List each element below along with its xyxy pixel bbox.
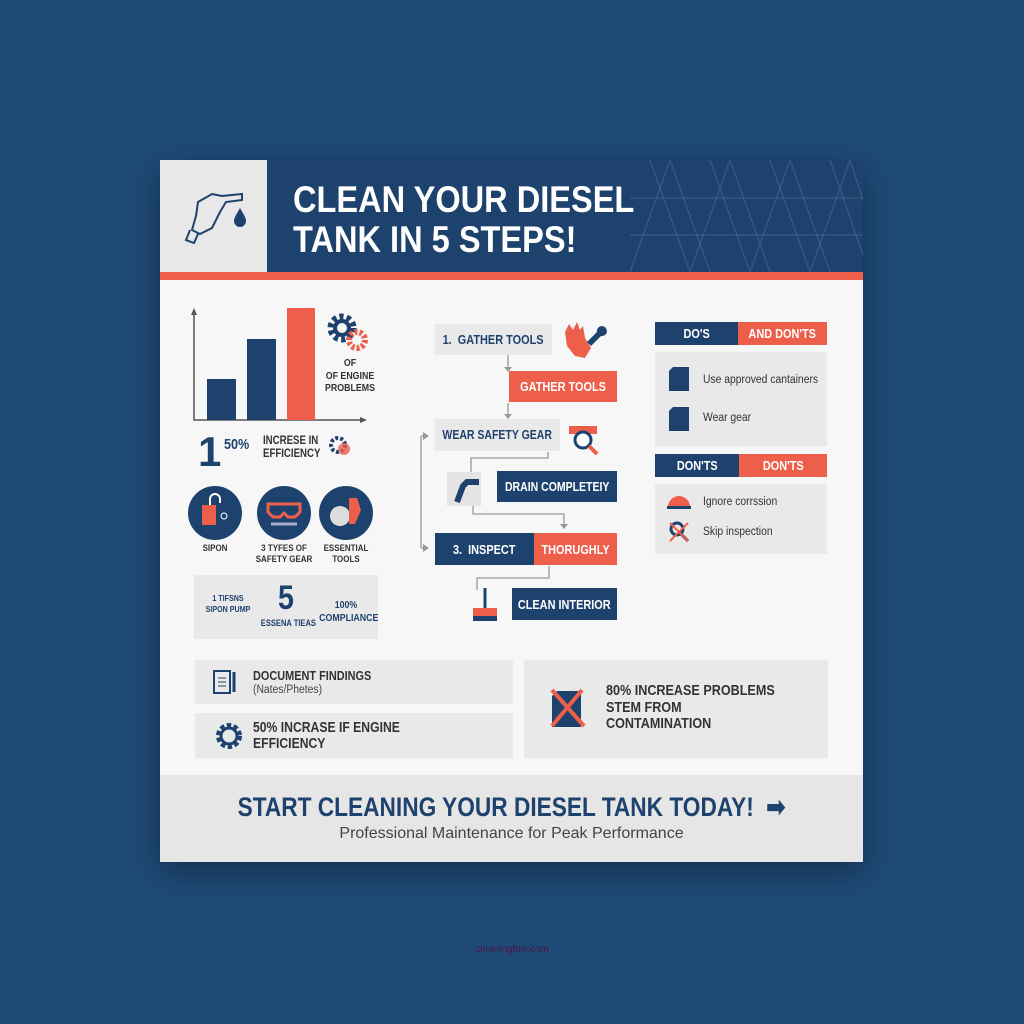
don'ts header: DON'TS	[677, 458, 717, 473]
icon: magnifier	[569, 426, 598, 456]
stat: 50% increase: 50%	[224, 436, 249, 453]
text: engine problems: OF	[344, 357, 356, 369]
contamination box: STEM FROM	[606, 698, 682, 716]
stats box: ESSENA TIEAS	[261, 618, 316, 628]
contamination box: 80% INCREASE PROBLEMS	[606, 682, 775, 699]
title: CLEAN YOUR DIESEL	[293, 179, 634, 220]
circle icons	[188, 486, 373, 565]
stats box	[194, 575, 378, 639]
orange stripe	[160, 272, 863, 280]
bar chart	[191, 308, 367, 423]
footer call to action: START CLEANING YOUR DIESEL TANK TODAY! ➡	[238, 792, 785, 822]
icon: siphon	[188, 486, 242, 540]
engine efficiency box	[195, 713, 513, 758]
do's list: Wear gear	[703, 412, 751, 424]
stat: 50% increase: 1	[198, 428, 221, 475]
do's list: Use approved cantainers	[703, 374, 818, 386]
stat: 50% increase: EFFICIENCY	[263, 448, 320, 460]
step 4	[435, 533, 617, 565]
stat: 50% increase: INCRESE IN	[263, 435, 318, 447]
step 1	[435, 324, 552, 355]
contamination box: CONTAMINATION	[606, 715, 711, 732]
icon: tools	[319, 486, 373, 540]
don'ts list	[655, 484, 827, 554]
do's panel: AND DON'TS	[749, 326, 816, 341]
step 4: THORUGHLY	[541, 542, 610, 556]
circle icons: SIPON	[203, 543, 227, 554]
step 3	[497, 471, 617, 502]
document findings box	[195, 660, 513, 704]
stats box: 5	[278, 579, 294, 617]
don'ts header	[655, 454, 739, 477]
step: gather tools orange: GATHER TOOLS	[520, 379, 606, 394]
icon: nozzle	[447, 472, 481, 506]
header	[160, 160, 863, 280]
circle icons: SAFETY GEAR	[256, 554, 312, 565]
stats box: 1 TIFSNS	[212, 593, 244, 603]
step 5: CLEAN INTERIOR	[518, 596, 611, 612]
card	[160, 160, 863, 862]
icon box: fuel nozzle	[160, 160, 267, 272]
stat: 50% increase	[198, 428, 350, 475]
do's panel	[655, 322, 827, 446]
don'ts panel	[655, 454, 827, 554]
connectors	[420, 355, 568, 590]
stats box: COMPLIANCE	[319, 612, 378, 624]
circle icons: 3 TYFES OF	[261, 543, 307, 554]
text: engine problems	[325, 357, 375, 394]
icon: gears	[328, 314, 368, 351]
circle icons: ESSENTIAL	[324, 543, 368, 554]
footer call to action	[160, 775, 863, 862]
flowchart	[420, 322, 617, 621]
circle icons: TOOLS	[332, 554, 360, 565]
header background	[160, 160, 863, 272]
engine efficiency box: 50% INCRASE IF ENGINE	[253, 720, 400, 736]
don'ts panel: DON'TS	[763, 458, 803, 473]
stats box: 100%	[335, 599, 357, 611]
step 4: 3. INSPECT	[453, 542, 516, 556]
step 2: WEAR SAFETY GEAR	[443, 428, 552, 442]
icon: goggles	[257, 486, 311, 540]
title: TANK IN 5 STEPS!	[293, 219, 576, 260]
don'ts list: Skip inspection	[703, 526, 773, 538]
icon: brush	[473, 588, 497, 621]
footer call to action: Professional Maintenance for Peak Performance	[339, 825, 684, 842]
contamination box	[524, 660, 828, 758]
text: engine problems: OF ENGINE	[326, 370, 374, 382]
document findings box: DOCUMENT FINDINGS	[253, 668, 371, 683]
text: engine problems: PROBLEMS	[325, 382, 375, 394]
step 1: 1. GATHER TOOLS	[443, 332, 544, 347]
do's header	[655, 322, 738, 345]
title	[293, 179, 634, 260]
document findings box: (Nates/Phetes)	[253, 684, 322, 696]
icon: gloves and wrench	[565, 322, 607, 358]
stats box: SIPON PUMP	[206, 604, 250, 614]
don'ts list: Ignore corrssion	[703, 496, 777, 508]
step 5	[512, 588, 617, 620]
do's header: DO'S	[683, 326, 710, 341]
engine efficiency box: EFFICIENCY	[253, 736, 325, 752]
step 3: DRAIN COMPLETEIY	[505, 480, 609, 494]
watermark: cleaningbro.com	[475, 944, 549, 955]
step: gather tools orange	[509, 371, 617, 402]
step 2	[435, 419, 560, 451]
do's list	[655, 352, 827, 446]
